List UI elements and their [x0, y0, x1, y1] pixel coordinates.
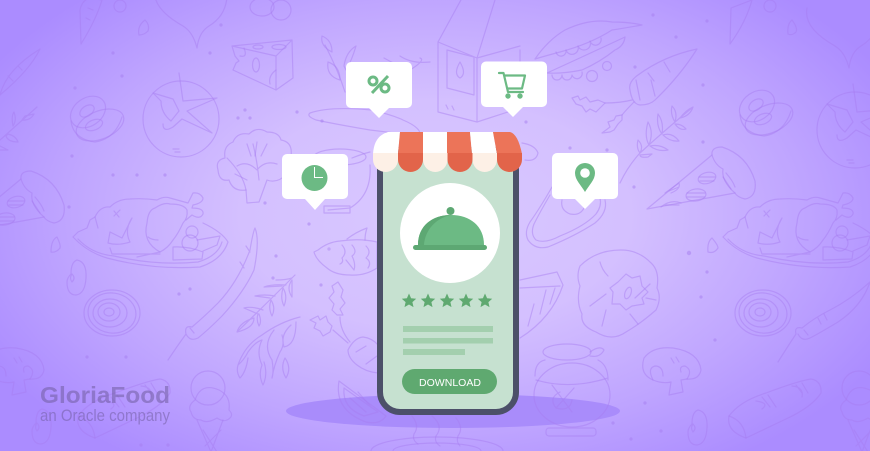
doodle: left pizza: [0, 171, 64, 233]
doodle: upper sprig herb: [237, 275, 295, 332]
ground shadow ellipse: [286, 394, 620, 428]
placeholder text lines: [403, 326, 493, 355]
doodle: carrot by phone: [310, 282, 378, 373]
doodle: mushrooms: [0, 348, 701, 395]
doodle: lower branch herb: [237, 317, 300, 385]
doodle: garlic bulb: [578, 250, 659, 337]
doodle: long chilli left: [168, 228, 257, 360]
icon: location pin: [575, 163, 595, 192]
doodle: rosemary: [322, 36, 356, 92]
download button: DOWNLOAD: [419, 377, 481, 389]
doodle: onions: [84, 290, 791, 336]
phone: [380, 150, 516, 412]
icon: percent: [369, 76, 389, 93]
phone body: [380, 150, 516, 412]
doodle: carrots top: [0, 0, 752, 95]
bubble: location pin: [552, 153, 618, 209]
doodle: fish: [314, 228, 377, 275]
doodle: left avocado: [64, 90, 128, 147]
doodle: baguette above awning: [309, 109, 420, 136]
doodle: herb sprig right: [620, 106, 693, 183]
doodle: avocado half: [522, 143, 606, 248]
star rating: [402, 294, 492, 307]
doodle: cheese: [232, 40, 293, 90]
doodle: top beets: [155, 0, 870, 68]
logo tagline: an Oracle company: [40, 407, 171, 425]
bubble: percent: [346, 62, 412, 118]
icon: clock: [302, 165, 328, 191]
doodle: honey jar: [534, 344, 610, 436]
doodle: jam jar behind bubble: [314, 149, 370, 213]
doodle: right tomato: [817, 84, 870, 168]
doodle: small beans top: [51, 0, 796, 252]
doodle: pot with steam: [371, 416, 503, 451]
plate circle: [400, 183, 500, 283]
doodle: left chicken: [73, 193, 228, 268]
doodle: top olives: [250, 0, 291, 20]
doodle: middle pizza: [647, 147, 755, 209]
bubble: clock: [282, 154, 348, 210]
doodle: carrot with leaves: [572, 49, 697, 133]
logo: [40, 382, 171, 425]
doodle: ice creams: [190, 371, 870, 451]
doodle: left tomato: [143, 73, 219, 157]
doodle: right chilli: [778, 282, 870, 362]
awning: [373, 132, 522, 172]
doodle: teapot: [384, 56, 430, 70]
doodle: peas: [535, 21, 642, 82]
doodle: salmon: [520, 272, 563, 338]
download button: [402, 369, 497, 394]
bubble: cart: [481, 62, 547, 117]
doodle: lemon: [338, 381, 386, 423]
doodle: dots: [67, 13, 717, 447]
doodle: right chicken: [723, 193, 870, 268]
doodle: breads: [78, 379, 821, 438]
doodle: left herb: [0, 107, 37, 150]
doodle: broccoli: [217, 129, 293, 203]
icon: cart: [499, 73, 525, 98]
icon: cloche: [413, 207, 487, 250]
doodle: right avocado: [733, 84, 797, 141]
doodle: milk carton: [438, 0, 520, 122]
doodle: beans: [32, 260, 707, 445]
logo name: GloriaFood: [40, 382, 170, 408]
